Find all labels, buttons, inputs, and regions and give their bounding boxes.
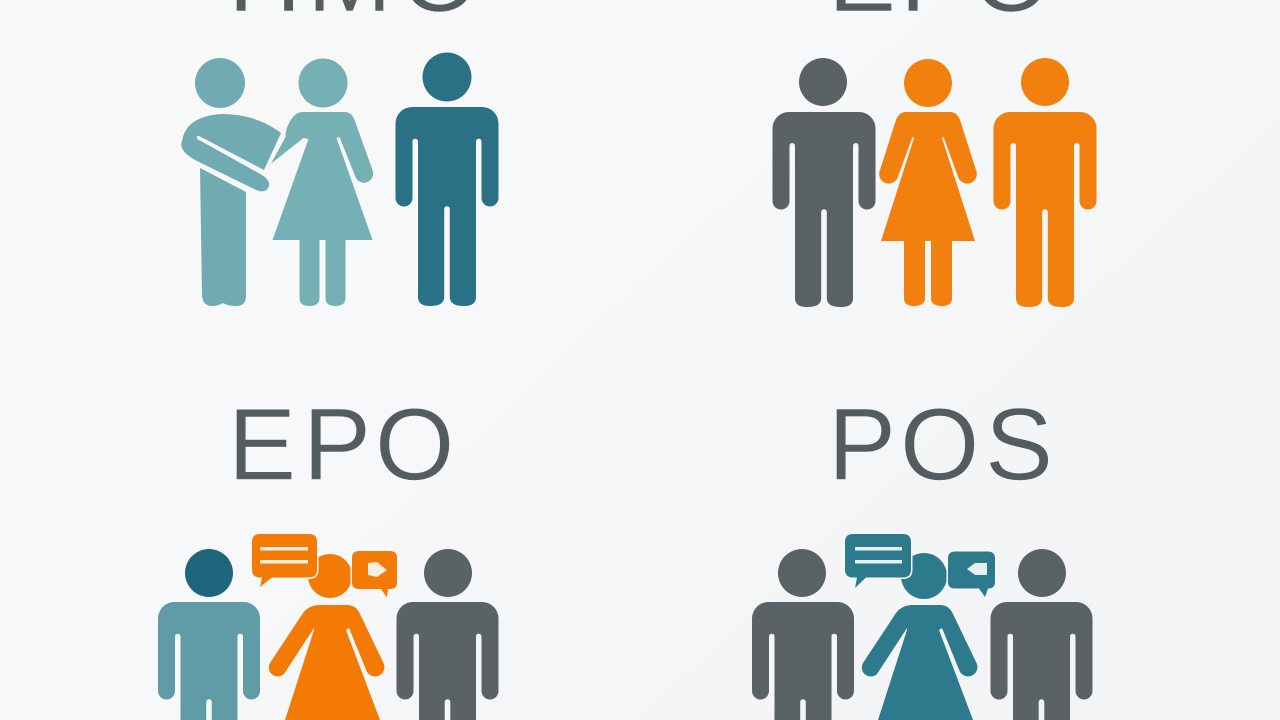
icon: speech bubble with text lines (845, 534, 911, 588)
figure group: EPO (158, 534, 498, 720)
icon: orange woman (879, 59, 977, 306)
icon: orange man (994, 58, 1096, 307)
icon: gray man (396, 549, 498, 720)
icon: speech bubble with wedge symbol (948, 552, 995, 597)
icon: gray man (772, 58, 876, 307)
icon: bending man (181, 58, 281, 306)
icon: speech bubble with text lines (252, 534, 317, 587)
figure group: top right (772, 58, 1096, 307)
figure group: HMO (181, 52, 498, 306)
figure group: POS (752, 534, 1092, 720)
icon: teal woman with speech bubbles (845, 534, 995, 720)
heading: POS: POS (828, 388, 1053, 502)
icon: teal man (158, 549, 260, 720)
icon: orange woman with speech bubbles (252, 534, 397, 720)
heading: EPO: EPO (228, 388, 454, 502)
icon: gray man (990, 549, 1092, 720)
icon: woman in dress (268, 58, 373, 306)
icon: gray man (752, 549, 854, 720)
icon: dark teal man (396, 52, 498, 306)
icon: speech bubble with play symbol (352, 551, 397, 598)
